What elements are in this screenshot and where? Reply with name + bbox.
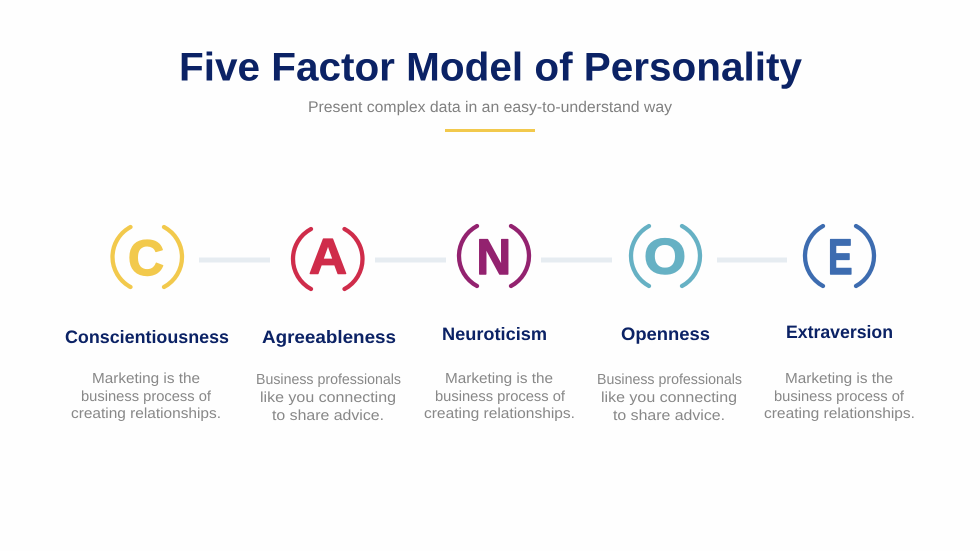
icon: O in brackets: O — [644, 228, 686, 284]
icon: A in brackets — [293, 228, 362, 289]
connector: N to O — [541, 258, 612, 262]
icon: N in brackets: N — [476, 229, 511, 285]
icon: E in brackets — [805, 226, 874, 286]
factor: Agreeableness: Agreeableness — [262, 327, 396, 347]
icon: N in brackets — [459, 226, 529, 286]
factor: Openness: to share advice. — [613, 408, 725, 424]
factor: Conscientiousness: Marketing is the — [92, 371, 200, 387]
factor: Neuroticism: Marketing is the — [445, 371, 553, 387]
subtitle: Present complex data in an easy-to-understand way — [308, 99, 672, 116]
factor: Openness: Openness — [621, 324, 710, 344]
factor: Conscientiousness: creating relationships. — [71, 406, 221, 422]
factor: Agreeableness: like you connecting — [260, 390, 396, 406]
factor: Agreeableness: to share advice. — [272, 408, 384, 424]
factor: Neuroticism: creating relationships. — [424, 406, 575, 422]
connector: C to A — [199, 258, 270, 262]
factor: Openness: Business professionals — [597, 372, 742, 388]
factor: Conscientiousness — [65, 327, 229, 422]
icon: O in brackets — [631, 226, 700, 286]
factor: Agreeableness: Business professionals — [256, 372, 401, 388]
factor: Openness: like you connecting — [601, 390, 737, 406]
title: Five Factor Model of Personality — [179, 46, 803, 90]
factor: Neuroticism: business process of — [435, 389, 566, 405]
title accent bar — [445, 129, 535, 132]
factor: Openness — [597, 324, 742, 424]
factor: Extraversion — [764, 322, 915, 422]
factor: Extraversion: business process of — [774, 389, 905, 405]
icon: A in brackets: A — [309, 228, 347, 284]
factor: Agreeableness — [256, 327, 401, 424]
factor: Extraversion: Extraversion — [786, 322, 893, 342]
icon: C in brackets — [113, 227, 182, 287]
connector: A to N — [375, 258, 446, 262]
factor: Neuroticism: Neuroticism — [442, 324, 547, 344]
factor: Neuroticism — [424, 324, 575, 422]
factor: Extraversion: creating relationships. — [764, 406, 915, 422]
icon: E in brackets: E — [828, 229, 852, 285]
connector: O to E — [717, 258, 787, 262]
factor: Conscientiousness: business process of — [81, 389, 212, 405]
factor: Extraversion: Marketing is the — [785, 371, 893, 387]
icon: C in brackets: C — [128, 230, 164, 286]
factor: Conscientiousness: Conscientiousness — [65, 327, 229, 347]
